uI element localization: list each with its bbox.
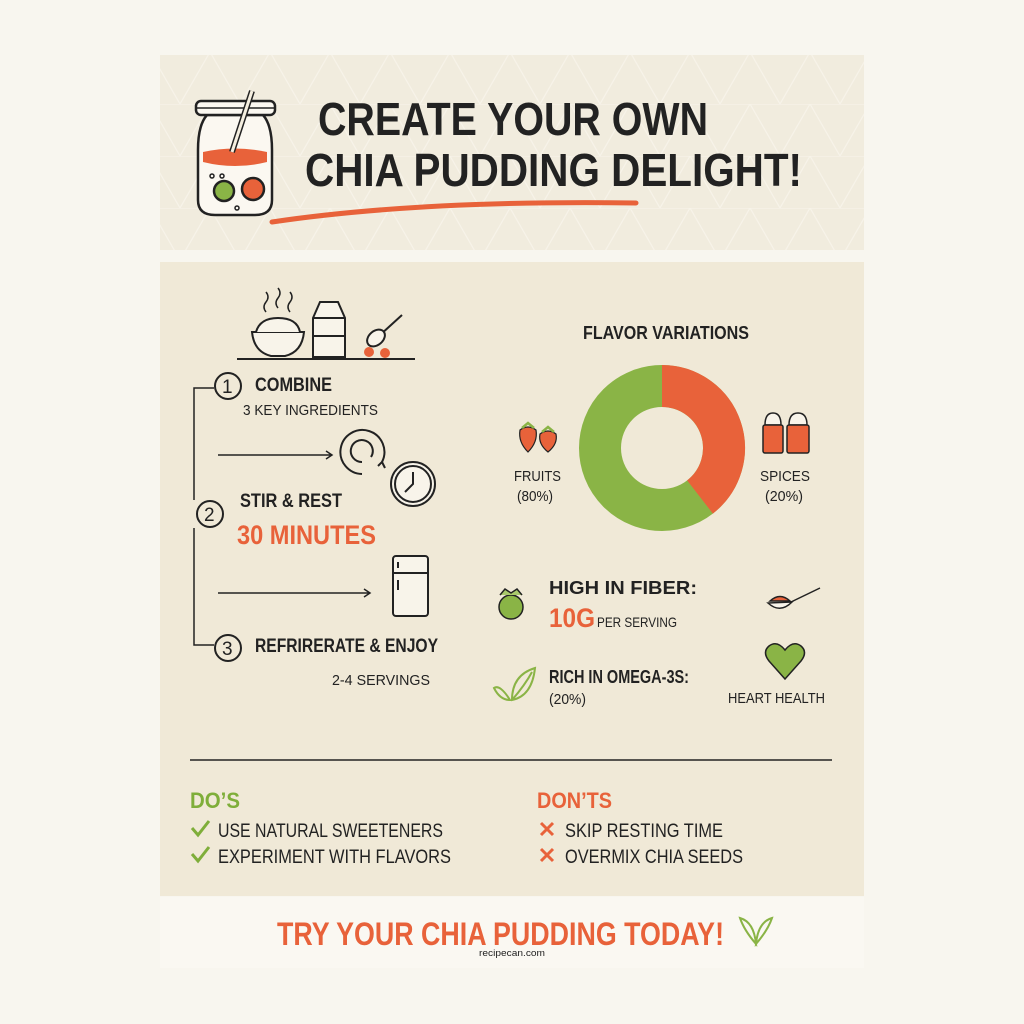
icon: footer leaves bbox=[740, 918, 772, 944]
icon: leaf bbox=[494, 668, 535, 700]
title bbox=[305, 93, 802, 196]
do's list: EXPERIMENT WITH FLAVORS bbox=[218, 847, 451, 868]
title underline bbox=[272, 203, 636, 222]
step 1: COMBINE bbox=[255, 375, 332, 396]
step 3: 2-4 SERVINGS bbox=[332, 672, 430, 689]
icon: green berry bbox=[499, 589, 523, 619]
fiber text bbox=[549, 578, 697, 633]
label: heart health: HEART HEALTH bbox=[728, 690, 825, 707]
step 1: 1 bbox=[222, 377, 233, 398]
main panel bbox=[160, 262, 864, 896]
icon: fridge bbox=[393, 556, 428, 616]
label: spices bbox=[760, 468, 810, 505]
footer banner: recipecan.com bbox=[479, 948, 545, 958]
footer banner: TRY YOUR CHIA PUDDING TODAY! bbox=[277, 916, 724, 952]
omega text: (20%) bbox=[549, 691, 586, 708]
header panel bbox=[160, 55, 864, 250]
do's list: DO’S bbox=[190, 788, 240, 813]
donut chart bbox=[600, 386, 724, 510]
label: fruits bbox=[514, 468, 561, 505]
step 2: 2 bbox=[204, 505, 215, 526]
step 3 bbox=[215, 635, 438, 689]
heading: flavor variations: FLAVOR VARIATIONS bbox=[583, 323, 749, 343]
step 3: 3 bbox=[222, 639, 233, 660]
steps bracket bbox=[194, 388, 370, 645]
don'ts list bbox=[537, 788, 743, 868]
step 2 bbox=[197, 491, 376, 550]
fiber text: 10G bbox=[549, 603, 595, 633]
icons: ingredients bbox=[237, 288, 415, 359]
icon: spoon bbox=[768, 588, 820, 608]
do's list: USE NATURAL SWEETENERS bbox=[218, 821, 443, 842]
title: CHIA PUDDING DELIGHT! bbox=[305, 144, 802, 196]
label: spices: SPICES bbox=[760, 468, 810, 485]
step 2: 30 MINUTES bbox=[237, 520, 376, 550]
step 3: REFRIRERATE & ENJOY bbox=[255, 636, 438, 657]
icon: spice shakers bbox=[763, 413, 809, 453]
label: fruits: (80%) bbox=[517, 488, 553, 505]
omega text: RICH IN OMEGA-3S: bbox=[549, 667, 689, 687]
fiber text: HIGH IN FIBER: bbox=[549, 578, 697, 598]
do's list bbox=[190, 788, 451, 868]
label: spices: (20%) bbox=[765, 488, 803, 505]
omega text bbox=[549, 667, 689, 708]
step 1: 3 KEY INGREDIENTS bbox=[243, 402, 378, 419]
title: CREATE YOUR OWN bbox=[318, 93, 708, 145]
don'ts list: SKIP RESTING TIME bbox=[565, 821, 723, 842]
don'ts list: DON’TS bbox=[537, 788, 612, 813]
icon: swirl and clock bbox=[340, 430, 435, 506]
icon: heart bbox=[766, 644, 804, 679]
footer banner bbox=[160, 897, 864, 968]
icon: strawberries bbox=[520, 423, 556, 452]
step 1 bbox=[215, 373, 378, 419]
step 2: STIR & REST bbox=[240, 491, 342, 512]
label: fruits: FRUITS bbox=[514, 468, 561, 485]
don'ts list: OVERMIX CHIA SEEDS bbox=[565, 847, 743, 868]
fiber text: PER SERVING bbox=[597, 614, 677, 630]
icon: jar bbox=[196, 91, 275, 215]
